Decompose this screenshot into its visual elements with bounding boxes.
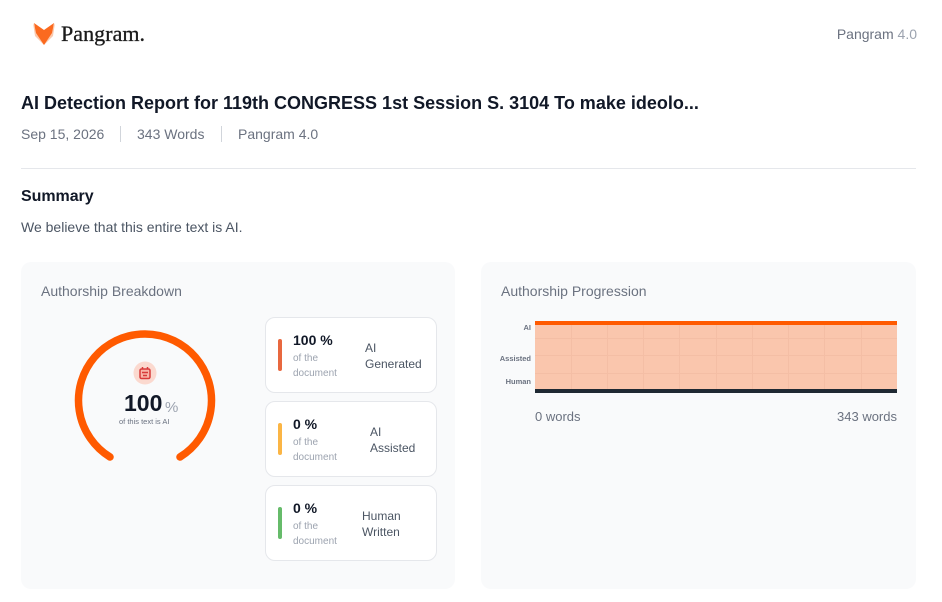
gauge value: 100	[124, 390, 162, 416]
AI line	[535, 321, 897, 325]
icon: pangram fox	[33, 23, 55, 45]
gauge	[74, 330, 216, 461]
card: AI assisted	[265, 401, 437, 477]
panel: authorship breakdown	[21, 262, 455, 589]
summary text: We believe that this entire text is AI.	[21, 219, 243, 235]
note: of the	[293, 521, 318, 532]
value: 100 %	[293, 332, 333, 348]
note: document	[293, 452, 337, 463]
indicator	[278, 423, 282, 455]
value: 0 %	[293, 416, 317, 432]
note	[293, 521, 337, 547]
note	[293, 437, 337, 463]
icon: robot	[134, 362, 156, 384]
breakdown heading: Authorship Breakdown	[41, 283, 182, 299]
gauge arc	[74, 330, 216, 461]
axis labels: Human	[506, 377, 531, 386]
panel: authorship progression	[481, 262, 916, 589]
label	[370, 425, 415, 455]
gauge caption: of this text is AI	[119, 417, 169, 426]
note: of the	[293, 353, 318, 364]
logo	[33, 21, 145, 46]
label	[362, 509, 401, 539]
chart fill	[535, 321, 897, 393]
report metadata	[21, 126, 318, 142]
indicator	[278, 507, 282, 539]
report metadata: 343 Words	[137, 126, 204, 142]
label	[365, 341, 422, 371]
note: of the	[293, 437, 318, 448]
progression chart	[500, 321, 897, 393]
label: Written	[362, 525, 400, 539]
card: human written	[265, 485, 437, 561]
summary heading: Summary	[21, 188, 94, 205]
human line	[535, 389, 897, 393]
label: Generated	[365, 357, 422, 371]
x axis end: 343 words	[837, 409, 897, 424]
axis labels: AI	[524, 323, 531, 332]
note	[293, 353, 337, 379]
card: AI generated	[265, 317, 437, 393]
report metadata: Pangram 4.0	[238, 126, 318, 142]
x axis start: 0 words	[535, 409, 581, 424]
version label: Pangram 4.0	[837, 26, 917, 42]
progression heading: Authorship Progression	[501, 283, 647, 299]
note: document	[293, 368, 337, 379]
indicator	[278, 339, 282, 371]
gauge percent sign: %	[165, 399, 178, 416]
label: Human	[362, 509, 401, 523]
label: Assisted	[370, 441, 415, 455]
label: AI	[365, 341, 376, 355]
report metadata: Sep 15, 2026	[21, 126, 104, 142]
axis labels	[500, 323, 531, 386]
note: document	[293, 536, 337, 547]
value: 0 %	[293, 500, 317, 516]
logo wordmark: Pangram.	[61, 21, 145, 46]
axis labels: Assisted	[500, 354, 531, 363]
label: AI	[370, 425, 381, 439]
title: AI Detection Report for 119th CONGRESS 1st Session S. 3104 To make ideolo...	[21, 93, 699, 113]
